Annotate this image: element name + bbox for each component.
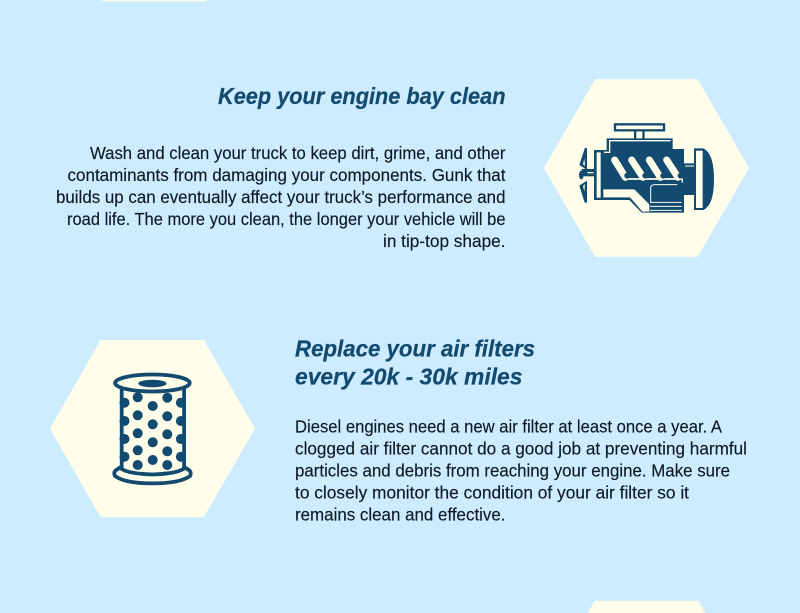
icon: engine <box>579 124 714 213</box>
cropped hexagon at bottom edge <box>573 601 720 613</box>
section: air filter body text: particles and debris from reaching your engine. Make sure <box>295 460 730 480</box>
section: engine bay body text: in tip-top shape. <box>383 231 506 251</box>
filter hexagon badge <box>50 340 255 517</box>
section: engine bay body text: contaminants from damaging your components. Gunk that <box>68 165 506 185</box>
section: replace air filters heading <box>295 336 535 389</box>
section: air filter body text: remains clean and effective. <box>295 504 506 524</box>
cropped hexagon at top edge <box>94 0 215 1</box>
section: air filter body text: Diesel engines need a new air filter at least once a year. A <box>295 416 722 436</box>
section: air filter body text: to closely monitor the condition of your air filter so it <box>295 482 689 502</box>
section: engine bay body text <box>56 143 506 251</box>
section: air filter body text <box>295 416 747 524</box>
section: engine bay body text: Wash and clean your truck to keep dirt, grime, and other <box>90 143 506 163</box>
section: replace air filters heading: every 20k - 30k miles <box>295 363 522 389</box>
section: keep engine bay clean heading: Keep your engine bay clean <box>218 83 506 109</box>
section: engine bay body text: builds up can eventually affect your truck’s performance and <box>56 187 506 207</box>
section: air filter body text: clogged air filter cannot do a good job at preventing harmful <box>295 438 747 458</box>
engine hexagon badge <box>544 79 749 257</box>
icon: air filter <box>114 374 191 483</box>
section: engine bay body text: road life. The more you clean, the longer your vehicle will be <box>67 209 506 229</box>
section: replace air filters heading: Replace your air filters <box>295 336 535 362</box>
